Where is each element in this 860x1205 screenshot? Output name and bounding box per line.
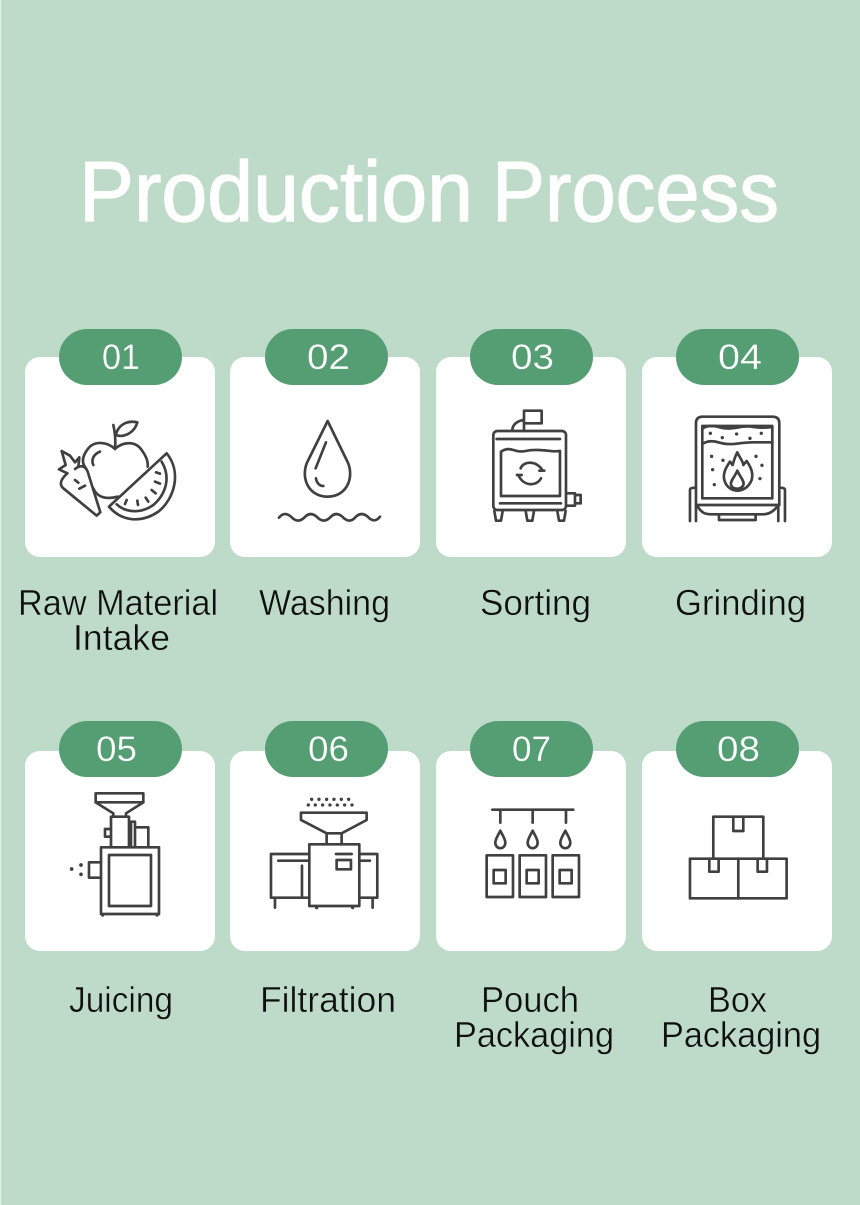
number badge 06 [265, 721, 388, 777]
label 01 [18, 582, 218, 658]
panel: step 02 washing [230, 329, 420, 623]
card background 06 [230, 751, 420, 951]
label 03: Sorting [480, 582, 591, 623]
label 07: Packaging [454, 1014, 614, 1055]
card background 08 [642, 751, 832, 951]
card background 03 [436, 357, 626, 557]
label 04: Grinding [675, 582, 806, 623]
title: Process [492, 145, 779, 240]
icon: filling nozzles and pouches [487, 810, 579, 897]
panel: step 05 juicing [25, 721, 215, 1020]
icon: filtration machine [271, 798, 377, 909]
label 07: Pouch [481, 979, 579, 1020]
card background 04 [642, 357, 832, 557]
panel: step 06 filtration [230, 721, 420, 1020]
card background 07 [436, 751, 626, 951]
label 02: Washing [259, 582, 390, 623]
panel: step 01 raw material intake [18, 329, 218, 658]
number badge 08: 08 [717, 730, 760, 769]
number badge 07: 07 [512, 730, 551, 769]
icon: juicing machine [70, 793, 159, 917]
panel: step 08 box packaging [642, 721, 832, 1055]
label 08: Packaging [661, 1014, 821, 1055]
label 01: Intake [73, 617, 170, 658]
number badge 03: 03 [511, 338, 554, 377]
card background 02 [230, 357, 420, 557]
number badge 05: 05 [96, 730, 137, 769]
icon: stacked boxes [690, 817, 787, 898]
number badge 04: 04 [718, 338, 762, 377]
icon: grinding machine with flame [690, 417, 785, 521]
icon: sorting tank [493, 411, 581, 521]
icon: apple, carrot and watermelon [59, 422, 175, 519]
label 08: Box [708, 979, 767, 1020]
card background 01 [25, 357, 215, 557]
label 07 [454, 979, 614, 1055]
label 05: Juicing [69, 979, 173, 1020]
number badge 02: 02 [307, 338, 350, 377]
title [79, 145, 779, 240]
number badge 04 [676, 329, 799, 385]
label 01: Raw Material [18, 582, 218, 623]
number badge 08 [676, 721, 799, 777]
number badge 06: 06 [308, 730, 349, 769]
label 06: Filtration [260, 979, 396, 1020]
icon: water drop and waves [279, 421, 380, 521]
card background 05 [25, 751, 215, 951]
panel: step 03 sorting [436, 329, 626, 623]
label 08 [661, 979, 821, 1055]
number badge 03 [470, 329, 593, 385]
number badge 05 [59, 721, 182, 777]
number badge 01: 01 [102, 338, 140, 377]
panel: step 04 grinding [642, 329, 832, 623]
title: Production [79, 145, 473, 240]
number badge 01 [59, 329, 182, 385]
panel: step 07 pouch packaging [436, 721, 626, 1055]
number badge 07 [470, 721, 593, 777]
number badge 02 [265, 329, 388, 385]
